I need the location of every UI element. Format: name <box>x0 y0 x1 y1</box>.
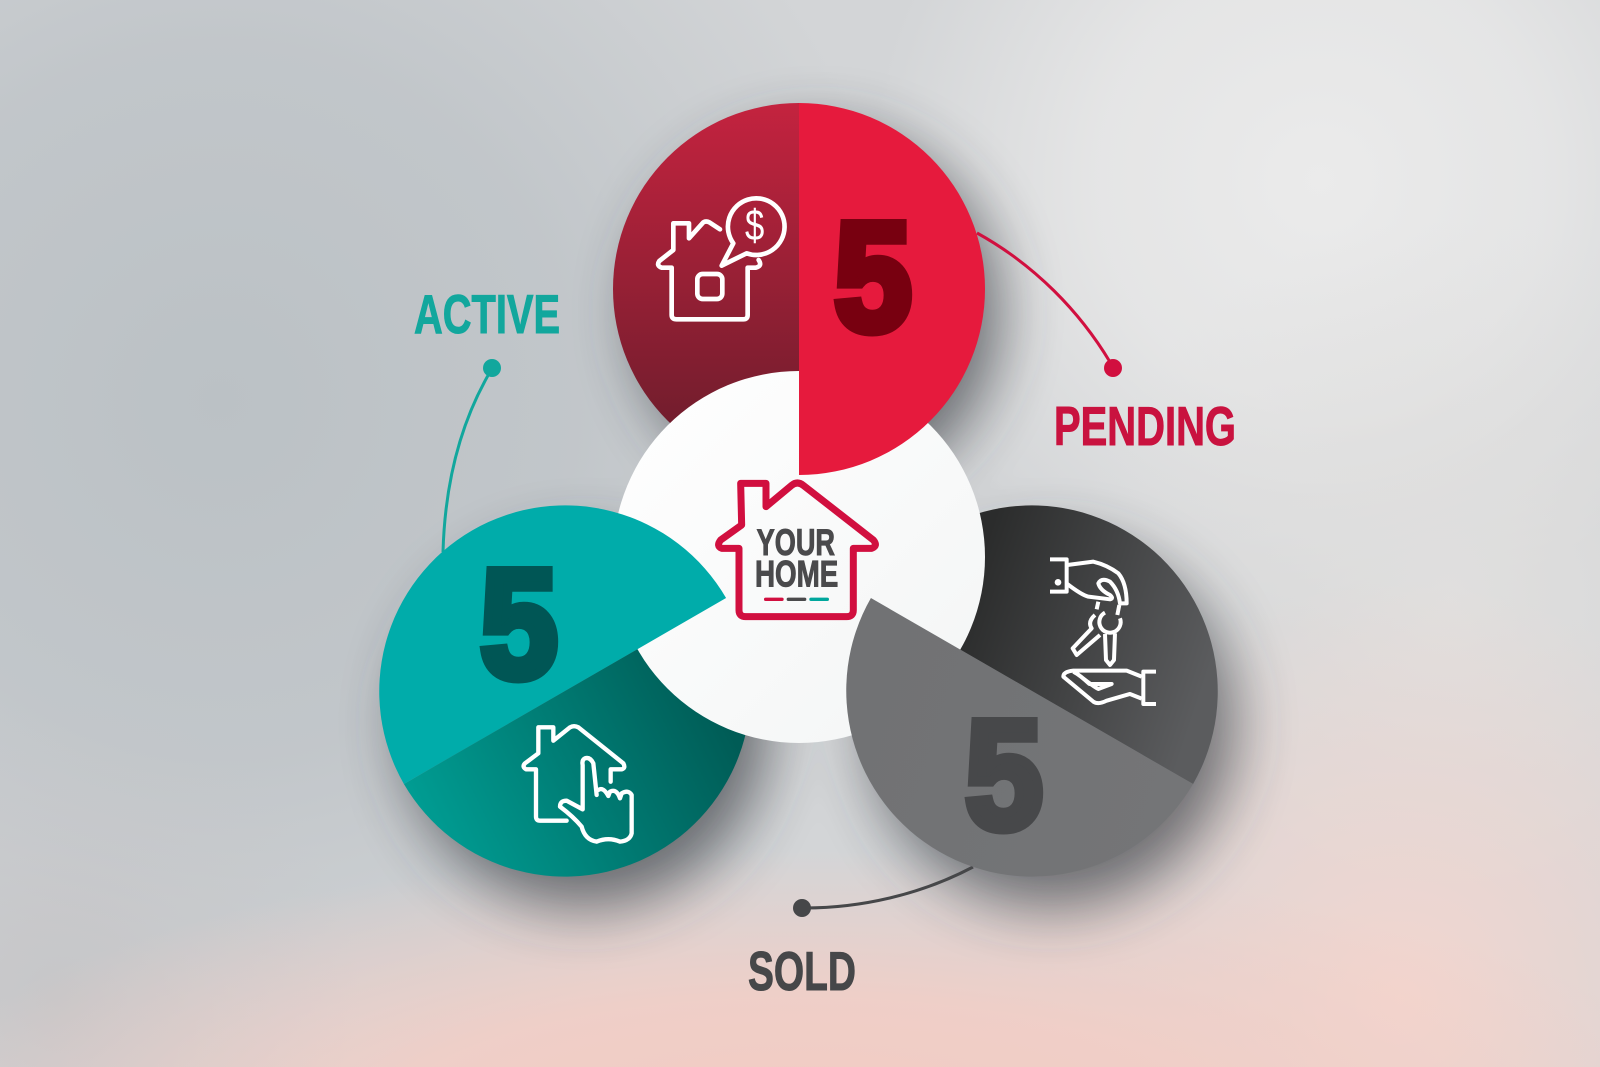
label: pending: PENDING <box>1054 395 1236 457</box>
number: sold count: 5 <box>965 689 1043 862</box>
center white circle <box>613 371 985 743</box>
connector line: pending <box>977 233 1122 377</box>
your home text: YOUR <box>757 521 835 563</box>
icon: your home house <box>719 483 875 617</box>
dark half: sold <box>871 505 1218 784</box>
connector line: active <box>443 359 501 552</box>
dark half: pending <box>613 103 799 475</box>
number: active count: 5 <box>480 538 558 711</box>
icon: hands passing keys <box>1050 559 1156 704</box>
your home text: HOME <box>755 553 838 595</box>
bright half: sold <box>846 598 1193 877</box>
three colour dashes <box>766 594 827 604</box>
icon: house with pointing hand <box>524 726 632 842</box>
connector line: sold <box>793 867 973 917</box>
bright half: pending <box>799 103 985 475</box>
bright half: active <box>379 505 726 784</box>
icon: house with price bubble: $ <box>745 201 764 250</box>
your home text <box>755 521 838 595</box>
icon: house with price bubble <box>658 198 785 319</box>
label: active: ACTIVE <box>414 283 560 345</box>
dark half: active <box>404 598 751 877</box>
label: sold: SOLD <box>748 940 856 1002</box>
number: pending count: 5 <box>834 191 912 364</box>
